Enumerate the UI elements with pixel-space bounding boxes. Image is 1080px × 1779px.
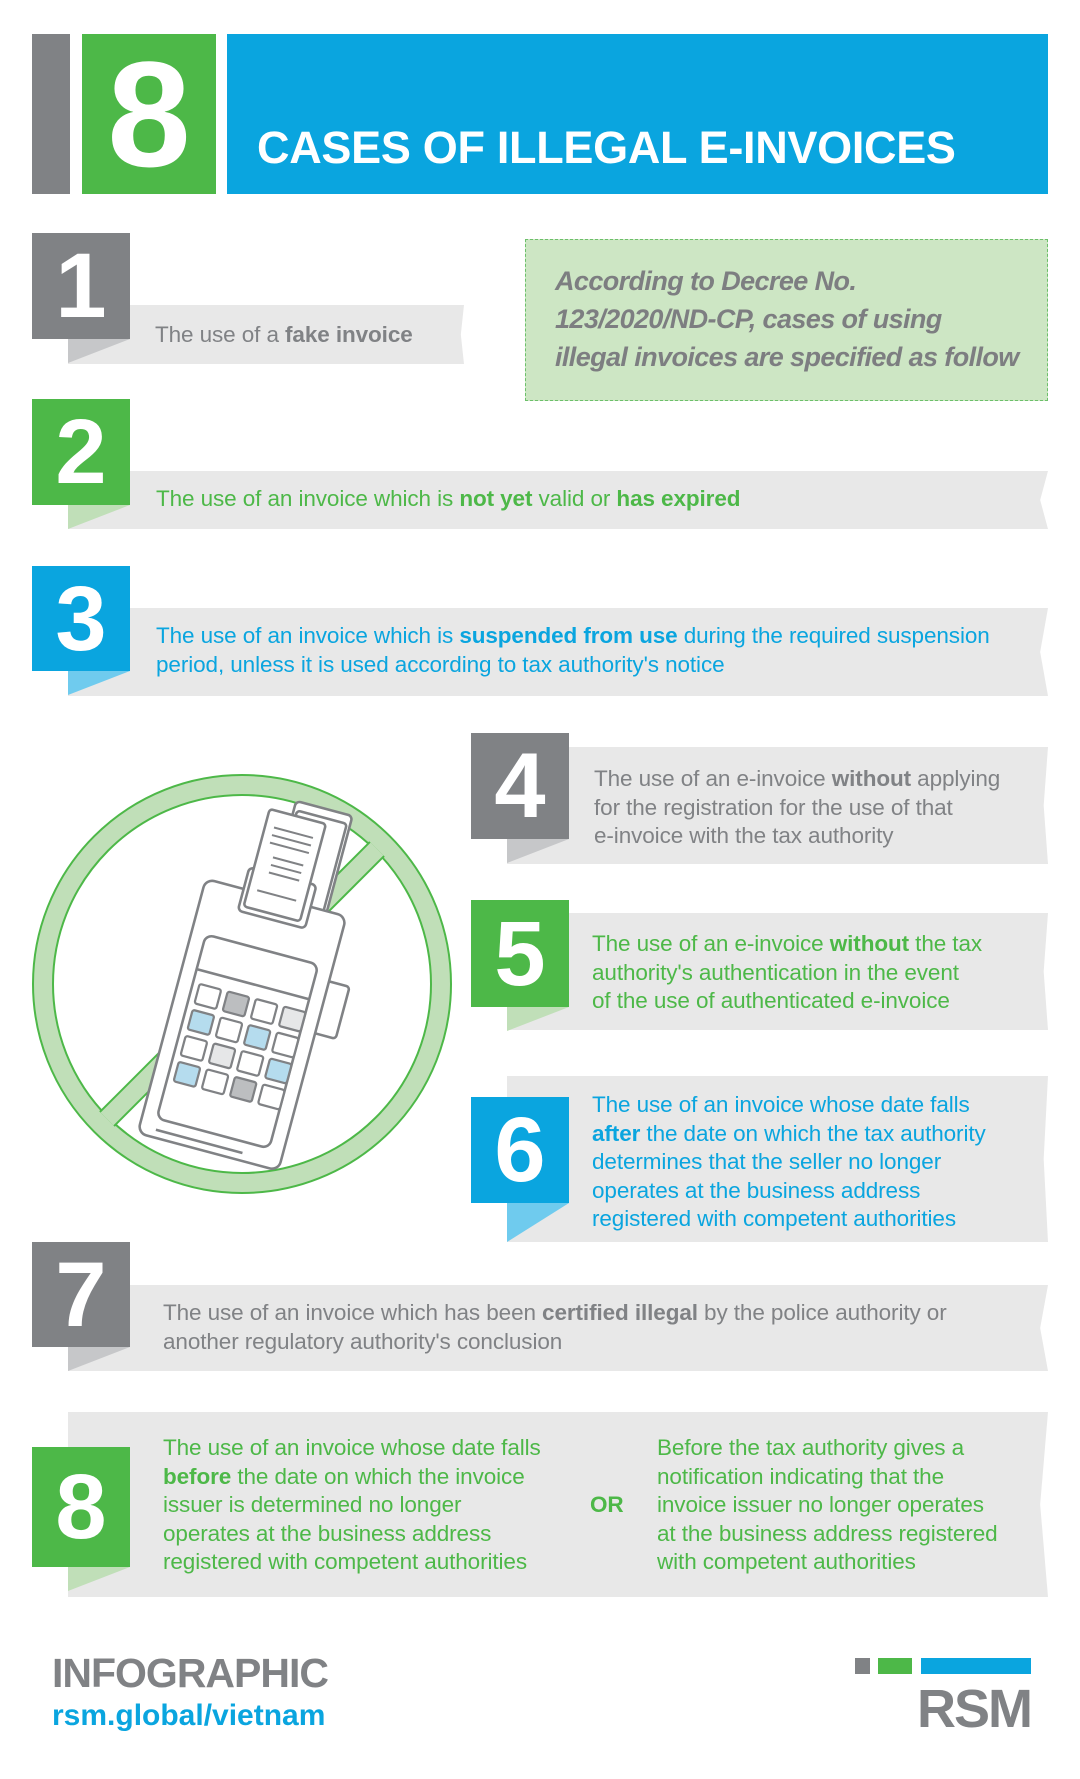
case 8 right text: Before the tax authority gives a: [657, 1435, 964, 1460]
case 8 left text: The use of an invoice whose date falls: [163, 1435, 541, 1460]
logo: RSM: RSM: [917, 1679, 1031, 1739]
footer: infographic label: INFOGRAPHIC: [52, 1650, 328, 1696]
case 4: [471, 733, 1048, 864]
case 3: 3: [55, 568, 107, 670]
case 7: another regulatory authority's conclusion: [163, 1328, 562, 1354]
case 2: [32, 399, 1048, 529]
note box: decree: 123/2020/ND-CP, cases of using: [555, 304, 942, 334]
case 8: 8: [55, 1456, 107, 1558]
header big number 8: [82, 34, 216, 194]
footer: infographic label: [52, 1650, 328, 1732]
case 6: The use of an invoice whose date falls: [592, 1092, 970, 1117]
case 8 left text: issuer is determined no longer: [163, 1492, 461, 1517]
logo: RSM: [855, 1658, 1031, 1739]
icon: prohibited cash register: [32, 774, 452, 1194]
case 7: 7: [55, 1244, 107, 1346]
case 8: [32, 1412, 1048, 1597]
case 5: 5: [494, 902, 546, 1004]
case 2: The use of an invoice which is not yet valid or has expired: [156, 486, 740, 511]
case 8 right text: at the business address registered: [657, 1520, 998, 1546]
case 8 left text: operates at the business address: [163, 1520, 491, 1546]
note box: decree: illegal invoices are specified as follow: [555, 342, 1019, 372]
case 6: registered with competent authorities: [592, 1206, 956, 1231]
case 3: period, unless it is used according to tax authority's notice: [156, 652, 725, 676]
case 1: [32, 233, 464, 364]
case 1: 1: [55, 235, 107, 337]
case 5: authority's authentication in the event: [592, 960, 959, 984]
case 3: The use of an invoice which is suspended from use during the required suspension: [156, 623, 990, 648]
case 8 right text: with competent authorities: [657, 1549, 916, 1574]
case 2: 2: [55, 401, 107, 503]
case 7: [32, 1242, 1048, 1371]
case 6: 6: [494, 1099, 546, 1201]
OR: OR: [590, 1492, 624, 1517]
header big number 8: 8: [107, 30, 191, 198]
note box: decree: [525, 239, 1048, 401]
case 7: The use of an invoice which has been certified illegal by the police authority or: [163, 1300, 947, 1325]
footer: infographic label: rsm.global/vietnam: [52, 1699, 325, 1732]
case 8 right text: notification indicating that the: [657, 1464, 944, 1488]
case 1: The use of a fake invoice: [155, 322, 413, 347]
header: [32, 30, 1048, 198]
header grey bar: [32, 34, 70, 194]
case 8 right text: invoice issuer no longer operates: [657, 1492, 984, 1517]
case 6: [471, 1076, 1048, 1242]
case 3: [32, 566, 1048, 696]
case 5: of the use of authenticated e-invoice: [592, 988, 950, 1013]
title: [227, 34, 1048, 194]
case 4: for the registration for the use of that: [594, 794, 953, 820]
case 8 right text: [657, 1435, 998, 1574]
case 6: operates at the business address: [592, 1178, 920, 1202]
case 8 left text: registered with competent authorities: [163, 1549, 527, 1574]
case 5: The use of an e-invoice without the tax: [592, 931, 982, 956]
case 6: determines that the seller no longer: [592, 1149, 941, 1174]
case 4: 4: [494, 735, 546, 837]
case 8 left text: before the date on which the invoice: [163, 1464, 525, 1488]
note box: decree: According to Decree No.: [555, 266, 856, 296]
case 5: [471, 900, 1048, 1031]
title: CASES OF ILLEGAL E-INVOICES: [257, 122, 956, 173]
case 4: e-invoice with the tax authority: [594, 823, 893, 848]
case 8 left text: [163, 1435, 541, 1574]
case 4: The use of an e-invoice without applying: [594, 766, 1000, 791]
case 6: after the date on which the tax authority: [592, 1120, 986, 1146]
